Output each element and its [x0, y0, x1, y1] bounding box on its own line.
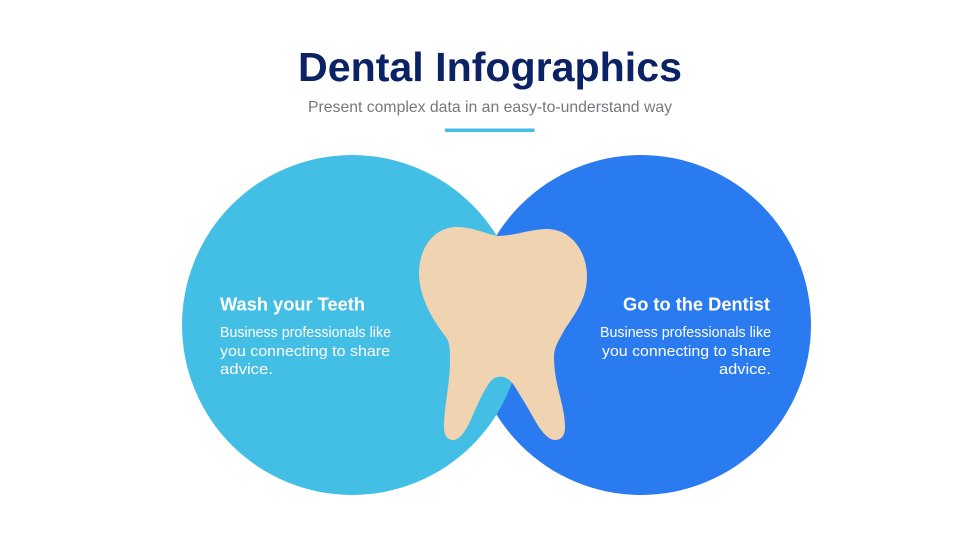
- title: Dental Infographics: [298, 44, 682, 90]
- body text: go to the dentist: you connecting to share: [602, 343, 771, 360]
- panel: go to the dentist text: [600, 294, 771, 378]
- panel: wash your teeth text: [220, 294, 391, 378]
- body text: go to the dentist: Business professionals like: [600, 324, 771, 341]
- heading: go to the dentist: Go to the Dentist: [623, 294, 770, 314]
- body text: wash your teeth: you connecting to share: [220, 343, 390, 360]
- accent underline: [445, 128, 534, 132]
- icon: tooth: [419, 227, 587, 440]
- right circle: [471, 155, 811, 495]
- body text: go to the dentist: [600, 324, 771, 378]
- heading: wash your teeth: Wash your Teeth: [220, 294, 365, 314]
- body text: wash your teeth: Business professionals like: [220, 324, 391, 341]
- left circle: [182, 155, 522, 495]
- body text: wash your teeth: advice.: [220, 361, 273, 378]
- body text: wash your teeth: [220, 324, 391, 378]
- subtitle: Present complex data in an easy-to-understand way: [308, 99, 672, 116]
- body text: go to the dentist: advice.: [719, 361, 771, 378]
